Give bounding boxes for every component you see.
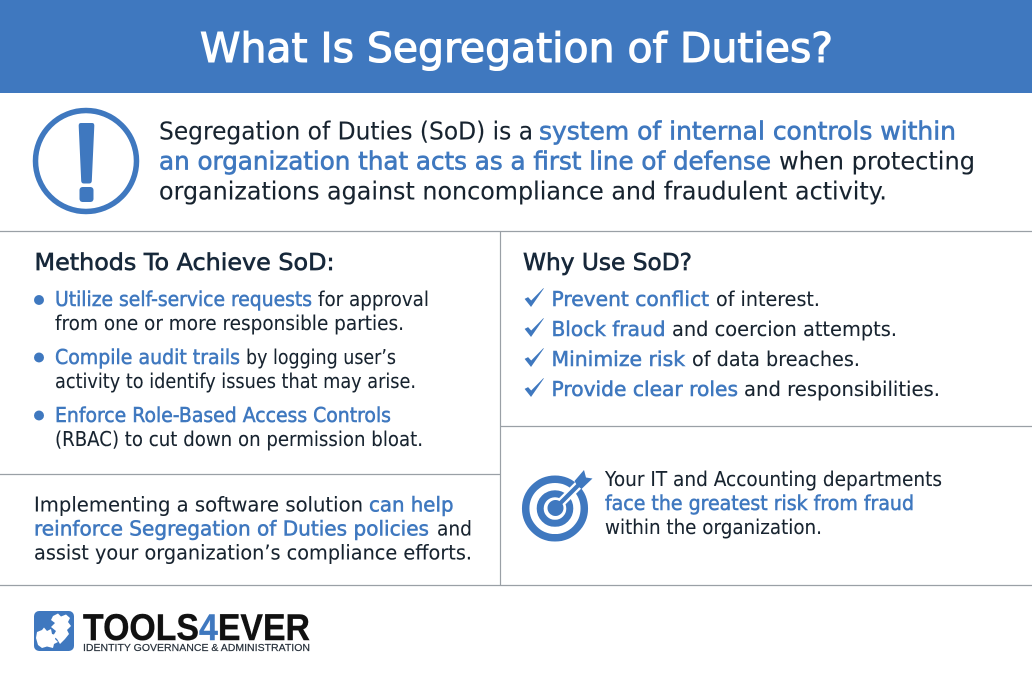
bullet: self-service requests: for approval — [318, 287, 429, 311]
check item: clear roles: and responsibilities. — [744, 377, 940, 401]
icon: exclamation mark in circle — [36, 110, 136, 212]
check item: minimize risk: Minimize risk — [552, 347, 685, 371]
check item: minimize risk: of data breaches. — [692, 347, 860, 371]
check item: prevent conflict: Prevent conflict — [552, 287, 709, 311]
bullet: role-based access controls: (RBAC) to cut down on permission bloat. — [55, 427, 423, 451]
definition text: an organization that acts as a first line of defense — [159, 146, 771, 176]
check item: prevent conflict — [525, 287, 820, 311]
definition text: system of internal controls within — [539, 116, 956, 146]
check item: minimize risk — [525, 347, 860, 371]
check item: clear roles — [525, 377, 940, 401]
text block: software solution: assist your organization’s compliance efforts. — [34, 540, 472, 564]
bullet: self-service requests — [34, 287, 429, 335]
panel: why use SoD — [523, 248, 940, 401]
text block: software solution — [34, 492, 472, 564]
title: What Is Segregation of Duties? — [200, 24, 833, 72]
bullet: self-service requests: Utilize self-service requests — [55, 287, 312, 311]
check item: block fraud: and coercion attempts. — [672, 317, 897, 341]
text block: greatest risk: face the greatest risk from fraud — [605, 491, 914, 515]
logo mark — [34, 611, 74, 651]
check item: block fraud — [525, 317, 897, 341]
bullet: audit trails: Compile audit trails — [55, 345, 240, 369]
logo wordmark: TOOLS4EVER — [83, 607, 310, 648]
heading: why: Why Use SoD? — [523, 248, 692, 276]
bullet: role-based access controls: Enforce Role-Based Access Controls — [55, 403, 391, 427]
definition text: when protecting — [779, 146, 975, 176]
bullet: role-based access controls — [34, 403, 423, 451]
text block: greatest risk — [604, 467, 942, 539]
panel: methods to achieve SoD — [34, 248, 429, 451]
text block: greatest risk: within the organization. — [605, 515, 822, 539]
bullet: audit trails — [34, 345, 416, 393]
header banner — [0, 0, 1032, 93]
heading: methods: Methods To Achieve SoD: — [34, 248, 334, 276]
definition text — [159, 116, 975, 206]
icon: target with arrow — [526, 470, 592, 538]
check item: prevent conflict: of interest. — [716, 287, 820, 311]
text block: software solution: Implementing a software solution — [34, 492, 363, 516]
definition text: Segregation of Duties (SoD) is a — [159, 116, 533, 146]
bullet: audit trails: by logging user’s — [246, 345, 396, 369]
text block: software solution: and — [437, 516, 472, 540]
logo tagline: IDENTITY GOVERNANCE & ADMINISTRATION — [83, 643, 310, 654]
text block: software solution: reinforce Segregation of Duties policies — [34, 516, 429, 540]
check item: clear roles: Provide clear roles — [552, 377, 738, 401]
logo: Tools4ever — [34, 607, 310, 654]
definition text: organizations against noncompliance and fraudulent activity. — [159, 176, 887, 206]
text block: greatest risk: Your IT and Accounting departments — [604, 467, 942, 491]
check item: block fraud: Block fraud — [552, 317, 666, 341]
bullet: self-service requests: from one or more responsible parties. — [55, 311, 404, 335]
bullet: audit trails: activity to identify issues that may arise. — [55, 369, 416, 393]
text block: software solution: can help — [369, 492, 454, 516]
